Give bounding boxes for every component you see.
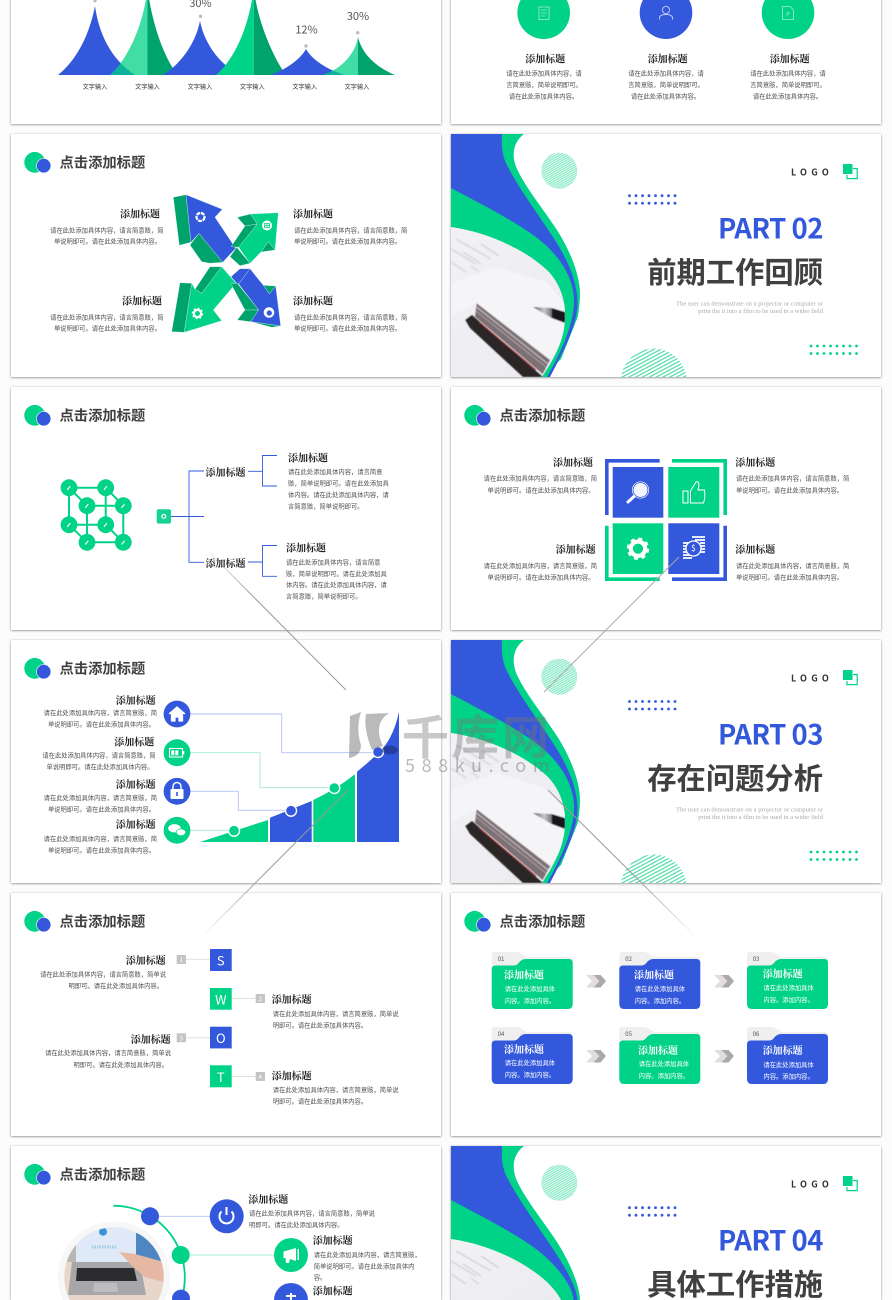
column 2 text (628, 50, 704, 100)
folder 04 (492, 1027, 573, 1084)
text block top left: 单说明即可。请在此处添加具体内容。 (54, 236, 161, 246)
panel: mountain chart slide (11, 0, 441, 124)
text block 1: 单说明即可。请在此处添加具体内容。 (48, 720, 155, 728)
logo: LOGO (791, 672, 833, 684)
icon: clipboard (517, 0, 570, 39)
number badges: 1 (180, 955, 183, 964)
watermark url: 588ku.com (405, 752, 556, 778)
folder 05: 添加标题 (638, 1042, 678, 1057)
subtitle: The user can demonstrate on a projector or computer or (676, 806, 824, 814)
text block 1: 明即可。请在此处添加具体内容。 (249, 1220, 343, 1229)
text block lower: 体内容。请在此处添加具体内容，请 (286, 580, 387, 589)
text block W: 明即可。请在此处添加具体内容。 (273, 1020, 367, 1030)
text block 2: 容。 (314, 1272, 326, 1282)
folder 03: 请在此处添加具体 (763, 983, 814, 992)
column 1 text: 添加标题 (525, 50, 565, 66)
number badges: 2 (259, 994, 263, 1003)
text block 1: 添加标题 (248, 1191, 288, 1206)
icon: chat (164, 817, 190, 844)
title icon (24, 911, 51, 932)
part number: PART 04 (718, 1218, 823, 1258)
text block bottom left: 请在此处添加具体内容，请言简意赅，简 (50, 312, 164, 322)
watermark dark spot (382, 746, 398, 754)
text block bottom right (735, 541, 849, 582)
text block bottom left: 添加标题 (122, 292, 162, 308)
photo: laptop (64, 1227, 164, 1300)
text block T: 明即可。请在此处添加具体内容。 (273, 1096, 367, 1106)
text block 2: 单说明即可。请在此处添加具体内容。 (46, 762, 154, 771)
value labels (189, 0, 369, 38)
O tile (210, 1027, 232, 1048)
text block bottom left (50, 292, 164, 332)
panel: PART 02 section slide (451, 134, 881, 414)
watermark name: 千库网 (402, 700, 552, 768)
part number: PART 02 (718, 206, 823, 246)
dots (810, 345, 858, 355)
panel: SWOT slide (11, 893, 441, 1136)
text block top right (293, 206, 407, 246)
text block top left: 添加标题 (553, 454, 593, 469)
text block 4: 单说明即可。请在此处添加具体内容。 (48, 846, 155, 854)
heading: 点击添加标题 (500, 404, 585, 426)
S tile: S (217, 950, 225, 970)
watermark logo mark (349, 712, 389, 758)
text block O: 明即可。请在此处添加具体内容。 (74, 1060, 168, 1069)
text block top left (484, 454, 597, 494)
icon: megaphone (274, 1238, 308, 1272)
column 3 text (750, 50, 826, 100)
arrow icons (192, 213, 274, 318)
folder 01 (492, 952, 573, 1009)
chart markers (228, 746, 384, 836)
text block upper (288, 450, 389, 510)
text block 4: 请在此处添加具体内容，请言简意赅，简 (44, 834, 157, 843)
column 3 text: 请在此处添加具体内容，请 (750, 68, 826, 78)
folder 01: 添加标题 (504, 966, 544, 982)
text block upper: 赅，简单说明即可。请在此处添加具 (288, 478, 389, 488)
text block 4 (44, 816, 157, 854)
text block top right: 请在此处添加具体内容，请言简意赅，简 (294, 226, 407, 234)
square frames (607, 461, 725, 579)
heading: 点击添加标题 (60, 152, 145, 172)
logo: LOGO (791, 1178, 833, 1190)
icon: third node (274, 1283, 308, 1300)
title icon (24, 658, 51, 679)
column 2 text: 添加标题 (648, 50, 688, 66)
text block upper: 添加标题 (288, 450, 328, 464)
panel: folder process slide (451, 893, 881, 1136)
text block 2: 简单说明即可。请在此处添加具体内 (314, 1262, 414, 1270)
text block lower: 添加标题 (286, 540, 326, 554)
icon: power (210, 1199, 244, 1233)
axis labels: 文字输入 (292, 82, 317, 91)
logo (791, 670, 857, 685)
wave artwork with photo (451, 134, 881, 414)
tile: thumbs up (668, 467, 719, 518)
text block T (272, 1068, 399, 1106)
column 2 text: 请在此处添加具体内容。 (631, 92, 700, 100)
text block 3 (44, 776, 157, 814)
chart markers (93, 0, 359, 48)
panel: PART 04 section slide (451, 1146, 881, 1300)
text block S (40, 952, 167, 990)
text block 1 (44, 692, 157, 728)
branch labels: 添加标题 (206, 464, 246, 479)
logo (791, 1176, 857, 1191)
dots (628, 700, 676, 710)
heading: 点击添加标题 (60, 910, 145, 932)
text block bottom right: 请在此处添加具体内容，请言简意赅，简 (294, 312, 407, 322)
panel: growth chart slide (11, 640, 441, 883)
text block T: 添加标题 (272, 1068, 312, 1082)
leader lines (186, 959, 256, 1076)
connector lines (171, 456, 277, 576)
text block top right: 单说明即可。请在此处添加具体内容。 (736, 486, 843, 494)
heading: 点击添加标题 (60, 1164, 145, 1184)
subtitle: print the it into a film to be used in a wider field (698, 814, 824, 821)
text block top left (50, 206, 164, 246)
icon: lock (164, 778, 190, 805)
title icon (464, 911, 491, 932)
text block top left: 请在此处添加具体内容，请言简意赅，简 (484, 474, 597, 482)
text block 3: 添加标题 (116, 776, 156, 791)
number badges: 3 (180, 1033, 183, 1042)
text block lower: 请在此处添加具体内容，请言简意 (286, 558, 380, 566)
text block bottom right: 添加标题 (293, 292, 333, 308)
text block 3: 单说明即可。请在此处添加具体内容。 (48, 804, 155, 814)
text block 1: 请在此处添加具体内容，请言简意赅，简单说 (249, 1208, 376, 1218)
diagonal watermark lines (197, 540, 694, 935)
connector lines (159, 1216, 274, 1255)
text block bottom left: 单说明即可。请在此处添加具体内容。 (487, 572, 594, 582)
arc nodes (141, 1207, 190, 1300)
folder 05: 请在此处添加具体 (639, 1059, 690, 1068)
text block 1: 请在此处添加具体内容，请言简意赅，简 (44, 708, 157, 717)
value labels: 12% (295, 22, 318, 38)
folder 04: 内容。添加内容。 (505, 1070, 555, 1079)
peak chart (58, 0, 395, 75)
title icon (464, 405, 491, 426)
text block O: 添加标题 (131, 1031, 171, 1046)
section title: 前期工作回顾 (647, 250, 823, 292)
dots (810, 851, 858, 861)
folder 06 (747, 1027, 828, 1084)
text block top right: 添加标题 (735, 454, 775, 469)
text block S: 明即可。请在此处添加具体内容。 (69, 981, 163, 990)
column 2 text: 言简意赅，简单说明即可。 (628, 80, 704, 89)
folder 03: 添加标题 (763, 966, 803, 980)
folder 02: 请在此处添加具体 (635, 984, 686, 993)
column 3 text: 请在此处添加具体内容。 (753, 92, 822, 100)
subtitle: print the it into a film to be used in a wider field (698, 308, 824, 315)
column 1 text: 言简意赅，简单说明即可。 (506, 80, 582, 89)
number badges (177, 955, 265, 1081)
heading: 点击添加标题 (60, 404, 145, 426)
dots (628, 194, 676, 205)
text block top right: 请在此处添加具体内容，请言简意赅，简 (736, 474, 849, 482)
section title: 存在问题分析 (647, 756, 823, 798)
folder 04: 04 (498, 1029, 505, 1038)
text block upper: 言简意赅，简单说明即可。 (288, 502, 364, 510)
subtitle (676, 300, 824, 315)
text block O (45, 1031, 172, 1069)
text block bottom left: 请在此处添加具体内容，请言简意赅，简 (484, 561, 597, 570)
text block lower: 言简意赅，简单说明即可。 (286, 592, 362, 600)
text block 2: 添加标题 (313, 1232, 353, 1247)
panel: quad icons slide (451, 387, 881, 630)
panel: arrows slide (11, 134, 441, 377)
text block lower (286, 540, 387, 600)
folder 01: 请在此处添加具体 (505, 984, 556, 993)
icon: document (762, 0, 814, 39)
text block bottom left: 单说明即可。请在此处添加具体内容。 (54, 324, 161, 332)
part number: PART 03 (718, 712, 823, 752)
axis labels: 文字输入 (83, 82, 107, 91)
stepped growth chart (200, 712, 399, 842)
dots (628, 1206, 676, 1217)
panel: PART 03 section slide (451, 640, 881, 920)
folder 02: 添加标题 (634, 966, 674, 982)
text block O: 请在此处添加具体内容，请言简意赅，简单说 (45, 1048, 172, 1057)
icon: battery (164, 739, 190, 766)
S tile (210, 949, 232, 971)
text block top left: 请在此处添加具体内容，请言简意赅，简 (50, 226, 164, 234)
folder 06: 请在此处添加具体 (763, 1060, 814, 1069)
text block 2: 请在此处添加具体内容，请言简意赅， (314, 1250, 421, 1259)
text block bottom right (293, 292, 407, 332)
folder 02 (619, 952, 700, 1009)
subtitle: The user can demonstrate on a projector or computer or (676, 300, 824, 308)
folder 06: 添加标题 (763, 1042, 803, 1057)
text block 2 (42, 734, 156, 771)
folder 02: 02 (625, 954, 633, 963)
title icon (24, 1164, 51, 1185)
text block bottom right: 单说明即可。请在此处添加具体内容。 (736, 572, 843, 582)
column 1 text (506, 50, 582, 100)
column 2 text: 请在此处添加具体内容，请 (628, 68, 704, 78)
W tile (210, 988, 232, 1010)
T tile: T (217, 1067, 225, 1086)
text block bottom left: 添加标题 (556, 541, 596, 556)
text block 1: 添加标题 (116, 692, 156, 707)
arrow chevrons row 2 (586, 1050, 734, 1062)
text block T: 请在此处添加具体内容，请言简意赅，简单说 (273, 1085, 399, 1094)
branch labels: 添加标题 (206, 555, 246, 570)
branch labels (206, 464, 246, 570)
icon: person (640, 0, 692, 39)
text block S: 添加标题 (126, 952, 166, 967)
text block 2 (313, 1232, 421, 1282)
heading: 点击添加标题 (60, 658, 145, 678)
panel: three circles slide (451, 0, 881, 124)
axis labels: 文字输入 (240, 82, 265, 91)
value labels: 30% (347, 8, 369, 24)
arrow chevrons row 1 (586, 975, 734, 988)
axis labels (83, 82, 369, 91)
text block upper: 体内容。请在此处添加具体内容，请 (288, 490, 389, 499)
text block bottom right: 请在此处添加具体内容，请言简意赅，简 (736, 561, 849, 570)
title icon (24, 405, 51, 426)
text block top right: 单说明即可。请在此处添加具体内容。 (294, 236, 401, 246)
text block 3: 添加标题 (313, 1282, 353, 1298)
logo: LOGO (791, 166, 833, 178)
text block W: 请在此处添加具体内容，请言简意赅，简单说 (273, 1009, 399, 1018)
text block 1 (248, 1191, 376, 1229)
text block 3: 请在此处添加具体内容，请言简意赅，简 (44, 793, 157, 802)
text block top right: 添加标题 (293, 206, 333, 220)
title icon (24, 152, 51, 173)
panel: radial list slide (11, 1146, 441, 1300)
folder 06: 06 (753, 1029, 760, 1038)
heading: 点击添加标题 (500, 910, 585, 932)
text block S: 请在此处添加具体内容，请言简意赅，简单说 (40, 970, 167, 978)
folder 03: 03 (753, 954, 759, 963)
axis labels: 文字输入 (188, 82, 212, 91)
panel: tree diagram slide (11, 387, 441, 630)
icon: home (164, 701, 190, 727)
wave artwork with photo (451, 1146, 580, 1300)
axis labels: 文字输入 (135, 82, 160, 91)
icon: molecule cube (61, 479, 132, 551)
icon: document: P (786, 10, 790, 18)
O tile: O (216, 1028, 226, 1047)
number badges: 4 (259, 1072, 263, 1081)
text block 2: 添加标题 (114, 734, 154, 748)
tile: magnifier (613, 467, 663, 518)
text block W (272, 991, 399, 1030)
column 3 text: 添加标题 (770, 50, 810, 66)
text block top left: 添加标题 (120, 206, 160, 220)
arc (113, 1206, 185, 1300)
tile: coins (668, 523, 719, 574)
tile: gear (613, 523, 663, 574)
column 1 text: 请在此处添加具体内容，请 (506, 68, 582, 78)
folder 05 (619, 1027, 700, 1084)
column 1 text: 请在此处添加具体内容。 (509, 92, 578, 100)
logo (791, 164, 857, 179)
four 3D arrows (172, 195, 281, 332)
folder 05: 05 (625, 1029, 632, 1038)
folder 03: 内容。添加内容。 (763, 995, 814, 1004)
tile: coins: $ (691, 543, 696, 554)
watermark (197, 540, 694, 935)
text block W: 添加标题 (272, 991, 312, 1006)
column 3 text: 言简意赅，简单说明即可。 (750, 80, 826, 89)
text block bottom right: 单说明即可。请在此处添加具体内容。 (294, 324, 401, 332)
T tile (210, 1065, 232, 1087)
folder 02: 内容。添加内容。 (635, 996, 685, 1005)
text block upper: 请在此处添加具体内容，请言简意 (288, 467, 382, 476)
folder 03 (747, 952, 828, 1009)
folder 04: 请在此处添加具体 (505, 1058, 556, 1067)
folder 04: 添加标题 (504, 1041, 544, 1056)
text block bottom left (484, 541, 597, 582)
text block lower: 赅，简单说明即可。请在此处添加具 (286, 569, 387, 578)
folder 05: 内容。添加内容。 (639, 1071, 689, 1080)
text block 2: 请在此处添加具体内容，请言简意赅，简 (42, 750, 156, 760)
text block top right (735, 454, 849, 494)
W tile: W (215, 989, 227, 1008)
subtitle (676, 806, 824, 821)
wave artwork with photo (451, 640, 881, 920)
connector lines (190, 714, 378, 830)
text block top left: 单说明即可。请在此处添加具体内容。 (487, 486, 594, 494)
icon: small node (157, 509, 171, 524)
text block 4: 添加标题 (116, 816, 156, 831)
folder 01: 内容。添加内容。 (505, 996, 555, 1005)
text block bottom right: 添加标题 (735, 541, 775, 556)
folder 01: 01 (498, 954, 504, 963)
folder 06: 内容。添加内容。 (763, 1072, 814, 1080)
axis labels: 文字输入 (345, 82, 369, 91)
